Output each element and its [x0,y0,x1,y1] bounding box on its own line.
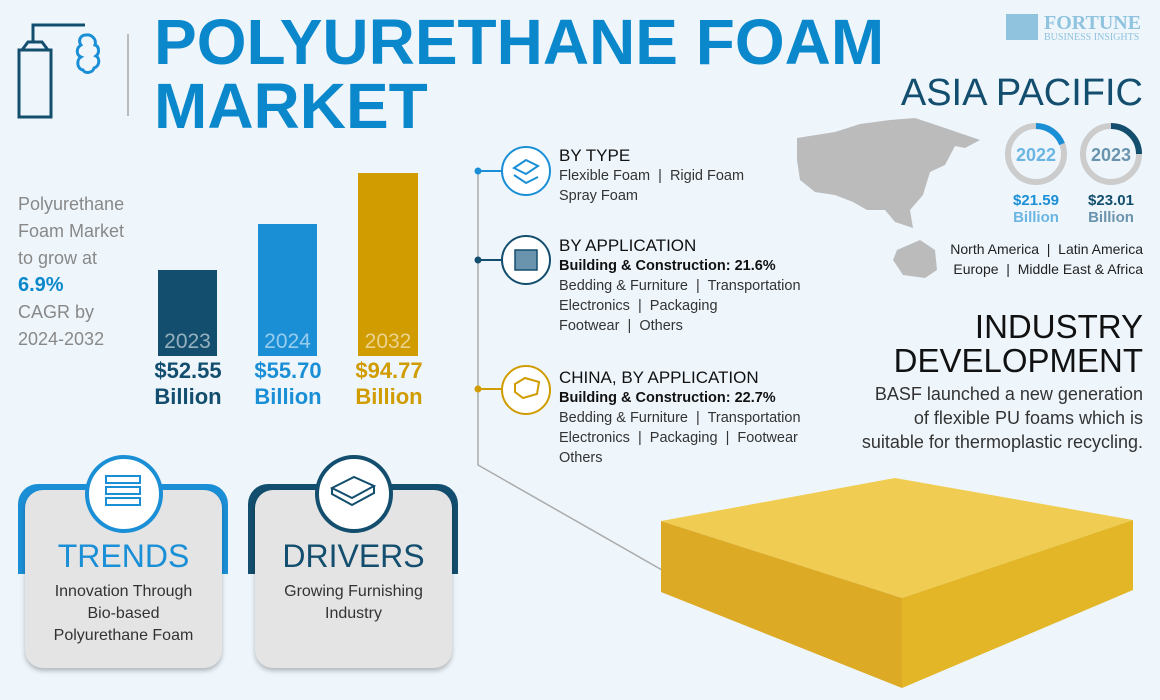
icon: foam layers [105,475,141,506]
bar chart: 2024 [264,330,311,353]
industry development: suitable for thermoplastic recycling. [862,432,1143,452]
donuts [1005,123,1142,185]
card: drivers: Growing Furnishing [284,583,423,600]
bar chart: Billion [355,384,423,409]
donuts: 2023 [1091,145,1131,165]
segment: by application: BY APPLICATION [559,236,696,255]
text: Billion [1088,209,1134,226]
segment: china [559,368,801,466]
icon: mattress [330,476,376,506]
segment: china: Others [559,450,603,466]
segment: by application: Bedding & Furniture | Transportation [559,278,801,294]
logo: FORTUNE [1044,12,1141,34]
segment: by application [559,236,801,334]
bar chart: Billion [254,384,322,409]
card: drivers: DRIVERS [282,538,425,574]
text: $23.01 [1088,192,1134,209]
connector line with segment icons [474,146,661,570]
CAGR text [18,194,124,349]
card: drivers [248,455,458,674]
segment: by type [559,146,744,204]
map [797,118,980,278]
bar chart [154,173,423,409]
donuts: 2022 [1016,145,1056,165]
other regions [950,241,1144,277]
bar chart: $52.55 [154,358,222,383]
industry development: BASF launched a new generation [875,384,1143,404]
CAGR text: 6.9% [18,274,64,296]
segment: by application: Electronics | Packaging [559,298,718,314]
industry development: INDUSTRY [975,308,1143,345]
CAGR text: CAGR by [18,302,94,322]
text: Billion [1013,209,1059,226]
bar chart: Billion [154,384,222,409]
CAGR text: to grow at [18,248,97,268]
CAGR text: 2024-2032 [18,329,104,349]
segment: by type: Flexible Foam | Rigid Foam [559,168,744,184]
card: drivers: Industry [325,605,382,622]
segment: by application: Building & Construction: 21.6% [559,258,776,274]
card: trends: Bio-based [87,605,160,622]
bar chart: 2032 [365,330,411,353]
card: trends: Innovation Through [55,583,192,600]
segment: by type: Spray Foam [559,188,638,204]
bar chart: $94.77 [355,358,423,383]
card: trends [18,455,228,674]
title: POLYURETHANE FOAM [154,6,884,78]
other regions: North America | Latin America [950,241,1143,257]
segment: by type: BY TYPE [559,146,630,165]
segment: china: Electronics | Packaging | Footwear [559,430,798,446]
logo [1006,12,1141,43]
segment: china: Building & Construction: 22.7% [559,390,776,406]
asia pacific heading: ASIA PACIFIC [901,72,1143,114]
segment: by application: Footwear | Others [559,318,683,334]
industry development: of flexible PU foams which is [914,408,1143,428]
card: trends: Polyurethane Foam [54,627,193,644]
bar chart: 2023 [164,330,211,353]
card: trends: TRENDS [58,538,189,574]
bar chart: $55.70 [254,358,322,383]
text: $21.59 [1013,192,1059,209]
CAGR text: Foam Market [18,221,124,241]
logo: BUSINESS INSIGHTS [1044,32,1139,43]
segment: china: Bedding & Furniture | Transportation [559,410,801,426]
other regions: Europe | Middle East & Africa [953,261,1143,277]
title [154,6,884,142]
foam block [661,478,1133,688]
industry development [862,308,1143,452]
CAGR text: Polyurethane [18,194,124,214]
title: MARKET [154,70,428,142]
icon: spray can [18,24,100,118]
industry development: DEVELOPMENT [894,342,1143,379]
segment: china: CHINA, BY APPLICATION [559,368,759,387]
